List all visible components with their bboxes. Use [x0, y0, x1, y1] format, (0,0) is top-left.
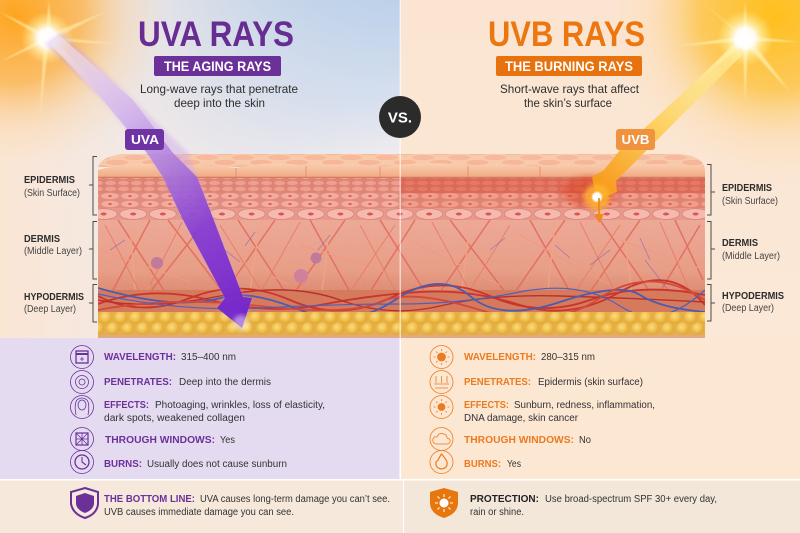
UVA tag: UVA: [131, 132, 160, 147]
VS badge: [379, 96, 421, 138]
UVB tag: UVB: [622, 132, 650, 147]
wavelength row: [464, 352, 595, 363]
wavelength row: WAVELENGTH:: [464, 352, 536, 363]
icon: orange shield: [430, 488, 458, 518]
effects row: Sunburn, redness, inflammation,: [514, 400, 655, 411]
UVA description: Long-wave rays that penetrate: [140, 82, 298, 96]
effects row: [104, 400, 325, 424]
UVA arrow beam: [45, 32, 252, 331]
UVA description: [140, 82, 298, 110]
burns row: Yes: [507, 459, 521, 470]
icon: sun: [430, 346, 453, 368]
effects row: dark spots, weakened collagen: [104, 413, 245, 424]
UVB subtitle pill: THE BURNING RAYS: [505, 59, 633, 74]
protection text: PROTECTION:: [470, 494, 539, 505]
right layer labels: (Deep Layer): [722, 303, 774, 314]
left layer labels: (Deep Layer): [24, 304, 76, 315]
icon: effects face: [70, 396, 94, 418]
burns row: [464, 459, 521, 470]
hypodermis blood vessels: [98, 279, 705, 312]
right layer labels: DERMIS: [722, 238, 758, 249]
wavelength row: 315–400 nm: [181, 352, 236, 363]
right layer labels: HYPODERMIS: [722, 291, 784, 302]
panel: UVA facts: [0, 338, 400, 479]
UVB description: the skin’s surface: [524, 96, 612, 110]
burns row: BURNS:: [104, 459, 142, 470]
through windows row: No: [579, 435, 591, 446]
background: right sky: [400, 0, 800, 340]
left layer labels: (Skin Surface): [24, 188, 80, 199]
skin cross-section illustration: [98, 153, 705, 335]
right layer bracket: [707, 164, 715, 321]
effects row: EFFECTS:: [464, 400, 509, 411]
effects row: Photoaging, wrinkles, loss of elasticity,: [155, 400, 325, 411]
bottom line text: UVA causes long-term damage you can’t see.: [200, 494, 390, 505]
UVB arrow beam: [584, 46, 742, 223]
bottom line text: [104, 494, 390, 518]
left layer labels: DERMIS: [24, 234, 60, 245]
right layer labels: [722, 183, 784, 314]
UVB sun: [678, 0, 800, 102]
skin surface: [98, 153, 705, 179]
right layer labels: (Middle Layer): [722, 251, 780, 262]
UVA subtitle pill: THE AGING RAYS: [164, 59, 271, 74]
icon: wavelength calendar: [70, 346, 94, 368]
left layer labels: [24, 175, 84, 315]
icon: clock: [70, 450, 94, 474]
icon: surface arrows: [430, 370, 453, 394]
UVB title: UVB RAYS: [488, 15, 645, 54]
UVA tag: [125, 129, 164, 150]
icon: flame: [430, 450, 453, 474]
penetrates row: Deep into the dermis: [179, 377, 271, 388]
burns row: BURNS:: [464, 459, 501, 470]
dermis with collagen fibres: [98, 220, 705, 295]
left layer labels: EPIDERMIS: [24, 175, 75, 186]
panel: UVB facts: [401, 338, 800, 479]
panel: bottom line: [0, 480, 403, 533]
effects row: EFFECTS:: [104, 400, 149, 411]
VS badge: VS.: [388, 110, 412, 126]
protection text: Use broad-spectrum SPF 30+ every day,: [545, 494, 717, 505]
bottom line text: THE BOTTOM LINE:: [104, 494, 195, 505]
panel: protection: [404, 480, 800, 533]
left layer labels: HYPODERMIS: [24, 292, 84, 303]
fat layer: [98, 312, 705, 335]
background: left sky: [0, 0, 400, 340]
penetrates row: Epidermis (skin surface): [538, 377, 643, 388]
right layer labels: (Skin Surface): [722, 196, 778, 207]
icon: burning sun: [430, 396, 453, 418]
right layer labels: EPIDERMIS: [722, 183, 772, 194]
penetrates row: [104, 377, 271, 388]
penetrates row: [464, 377, 643, 388]
effects row: DNA damage, skin cancer: [464, 413, 579, 424]
icon: penetrates rings: [70, 370, 94, 394]
UVA description: deep into the skin: [174, 96, 265, 110]
through windows row: THROUGH WINDOWS:: [464, 435, 574, 446]
effects row: [464, 400, 655, 424]
UVA title: UVA RAYS: [138, 15, 294, 54]
left layer labels: (Middle Layer): [24, 246, 82, 257]
icon: cloud: [430, 428, 453, 450]
epidermis cell layers: [98, 176, 705, 220]
UVB tag: [616, 129, 655, 150]
UVB subtitle pill: [496, 56, 642, 76]
UVA sun: [0, 0, 118, 118]
through windows row: Yes: [220, 435, 235, 446]
through windows row: THROUGH WINDOWS:: [105, 435, 215, 446]
burns row: Usually does not cause sunburn: [147, 459, 287, 470]
protection text: rain or shine.: [470, 507, 524, 518]
icon: window: [70, 428, 94, 450]
bottom line text: UVB causes immediate damage you can see.: [104, 507, 294, 518]
protection text: [470, 494, 717, 518]
penetrates row: PENETRATES:: [464, 377, 531, 388]
penetrates row: PENETRATES:: [104, 377, 172, 388]
wavelength row: WAVELENGTH:: [104, 352, 176, 363]
left layer bracket: [89, 156, 97, 322]
wavelength row: [104, 352, 236, 363]
UVB description: [500, 82, 640, 110]
center divider: [400, 0, 401, 533]
UVB description: Short-wave rays that affect: [500, 82, 640, 96]
wavelength row: 280–315 nm: [541, 352, 595, 363]
UVA subtitle pill: [154, 56, 281, 76]
icon: purple shield: [71, 488, 98, 518]
